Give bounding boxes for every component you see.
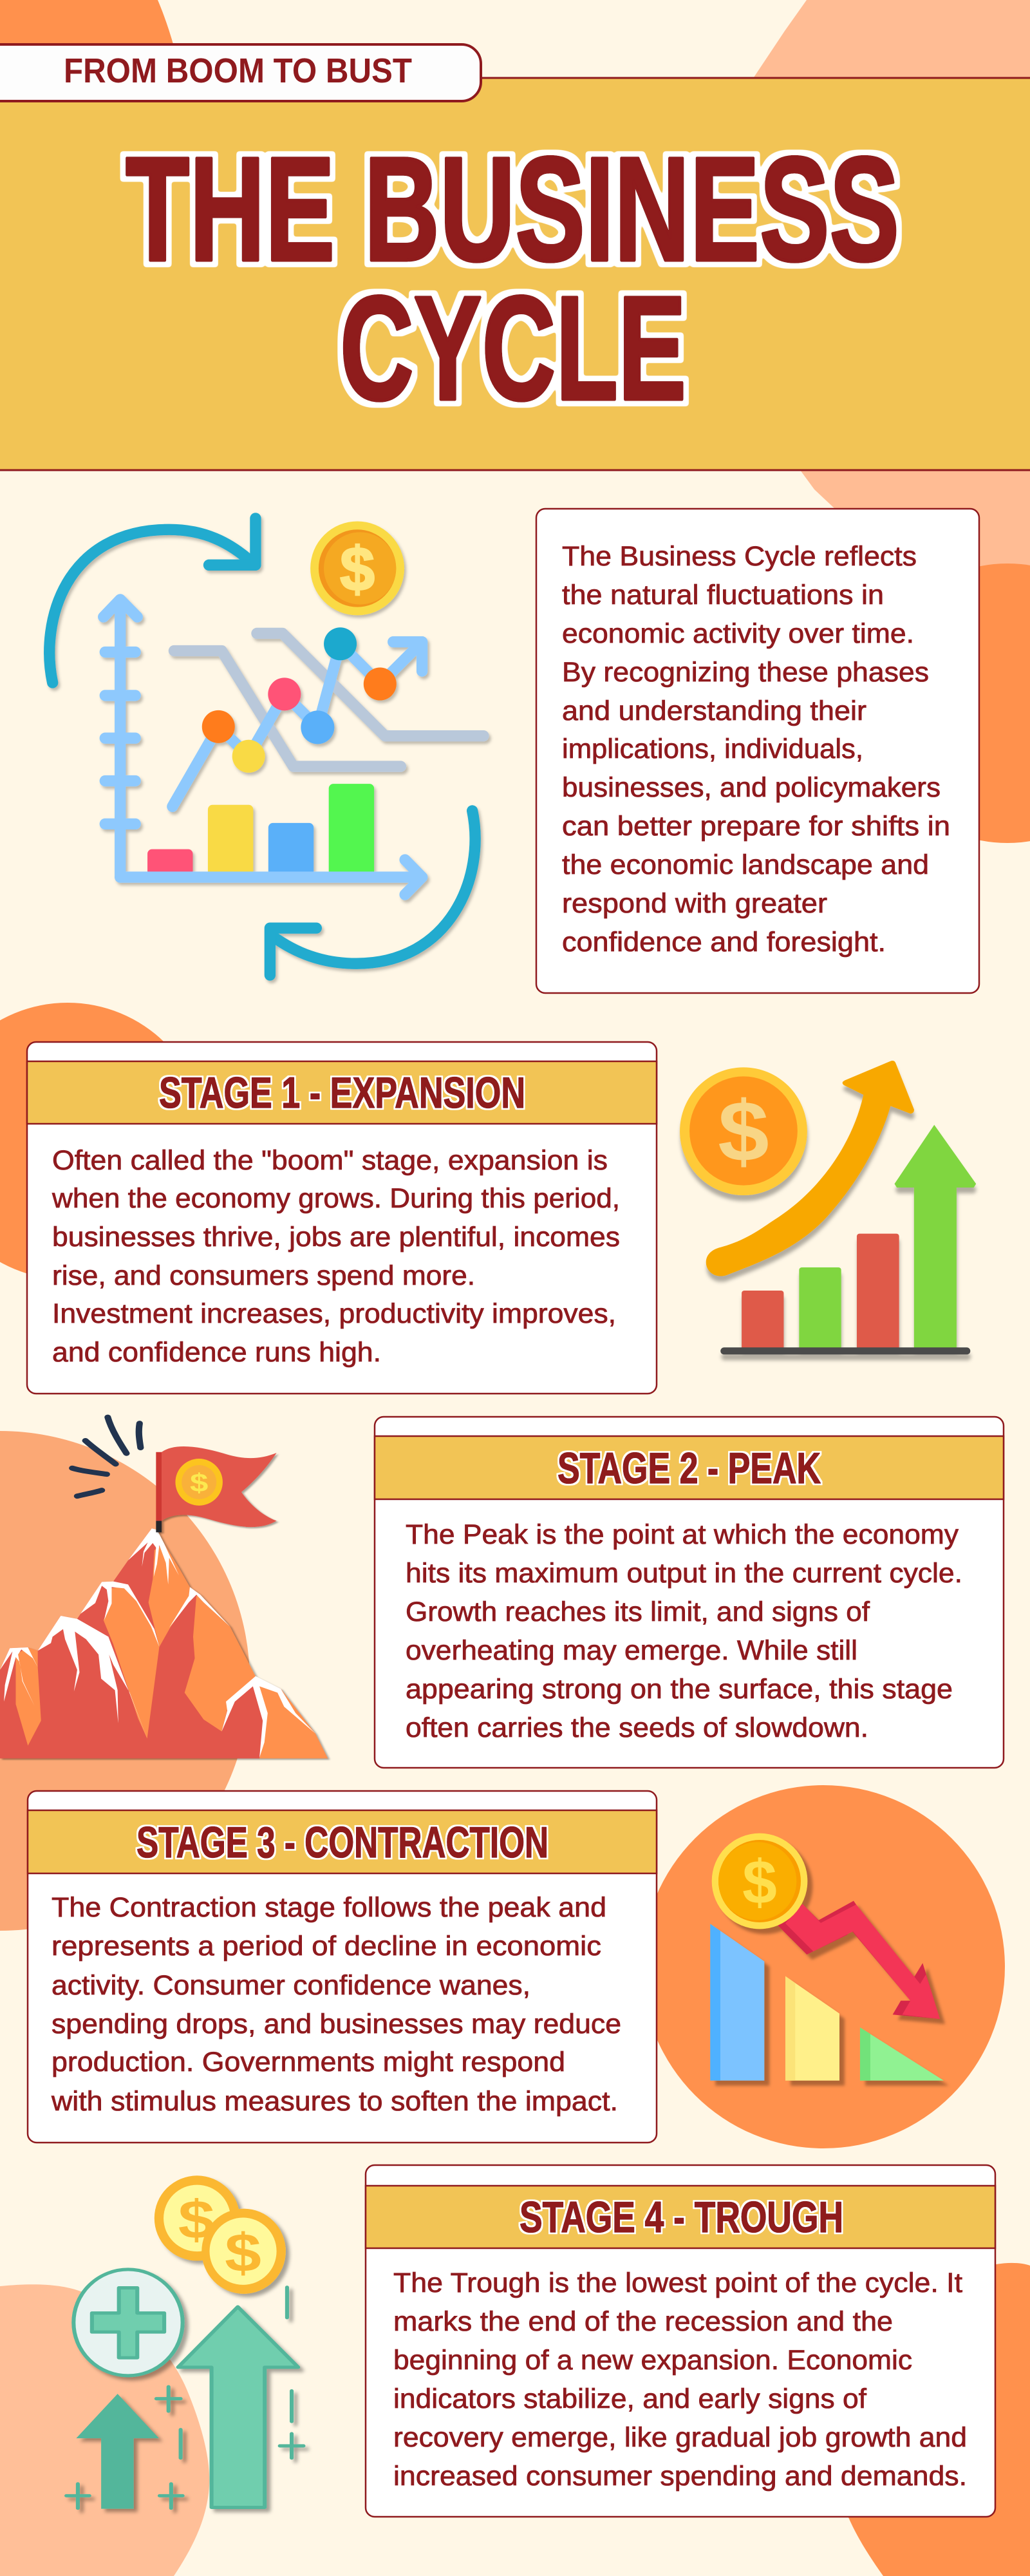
body text: stage 4: recovery emerge, like gradual job growth and <box>393 2422 967 2453</box>
body text: stage 4: beginning of a new expansion. Economic <box>393 2345 912 2376</box>
panel: intro: respond with greater <box>562 888 827 919</box>
background blob: top left orange <box>0 0 183 90</box>
body text: stage 4: The Trough is the lowest point of the cycle. It <box>393 2268 962 2298</box>
front coin: $ <box>225 2222 261 2283</box>
background blob: right orange circle <box>868 564 1030 843</box>
subtitle tag <box>0 44 481 101</box>
panel: intro: By recognizing these phases <box>562 657 929 688</box>
body text: stage 3: production. Governments might respond <box>52 2047 565 2078</box>
background blob: top right peach <box>747 0 1030 580</box>
back coin <box>154 2175 239 2260</box>
body text: stage 4: marks the end of the recession and the <box>393 2306 893 2337</box>
coin <box>310 521 404 615</box>
body text: stage 2: overheating may emerge. While still <box>406 1635 857 1666</box>
icon: declining chart with coin <box>710 1833 944 2081</box>
emphasis dashes <box>72 1417 140 1496</box>
gray trend lines <box>174 633 483 766</box>
small arrow <box>76 2394 159 2509</box>
cycle arrow top <box>50 518 256 683</box>
body text: stage 3: spending drops, and businesses may reduce <box>52 2009 621 2040</box>
bars <box>147 784 374 875</box>
rising arrow <box>706 1061 914 1276</box>
heading: stage 4: STAGE 4 - TROUGH <box>520 2193 843 2242</box>
body text: stage 3: The Contraction stage follows the peak and <box>52 1892 606 1923</box>
bars <box>710 1924 944 2081</box>
bars <box>742 1125 976 1350</box>
body text: stage 2: The Peak is the point at which the economy <box>406 1519 959 1550</box>
title text: CYCLE <box>340 265 686 431</box>
back coin: $ <box>178 2189 214 2250</box>
body text: stage 3 <box>51 1892 621 2117</box>
mountain <box>0 1528 328 1758</box>
coin: $ <box>340 534 375 604</box>
cycle arrow bottom <box>270 811 475 975</box>
panel: stage 3 <box>28 1791 657 2143</box>
title text <box>126 126 899 431</box>
body text: stage 1: businesses thrive, jobs are plentiful, incomes <box>52 1222 620 1253</box>
icon: business cycle chart <box>50 518 483 975</box>
icon: growth chart with coin <box>680 1061 976 1354</box>
panel: intro: economic activity over time. <box>562 618 914 649</box>
body text: stage 2 <box>406 1519 962 1743</box>
background blob: stage 3 orange circle <box>642 1785 1005 2148</box>
background blob: stage 2 peach circle <box>0 1431 250 1931</box>
heading: stage 1: STAGE 1 - EXPANSION <box>159 1068 525 1117</box>
panel: intro: implications, individuals, <box>562 734 863 764</box>
coin <box>680 1067 807 1195</box>
flag <box>156 1446 277 1532</box>
body text: stage 3: with stimulus measures to soften the impact. <box>51 2086 618 2117</box>
body text: stage 1: when the economy grows. During this period, <box>52 1183 620 1214</box>
coin: $ <box>742 1848 777 1917</box>
coin: $ <box>718 1084 769 1180</box>
flag coin <box>175 1459 223 1506</box>
body text: stage 2: appearing strong on the surface, this stage <box>406 1674 953 1705</box>
panel: intro: The Business Cycle reflects <box>562 541 917 572</box>
body text: stage 4: indicators stabilize, and early signs of <box>393 2383 867 2414</box>
background blob: stage 1 orange circle <box>0 1003 206 1280</box>
heading: stage 2: STAGE 2 - PEAK <box>557 1444 821 1493</box>
body text: stage 3: activity. Consumer confidence wanes, <box>52 1970 530 2001</box>
axes <box>104 600 422 895</box>
body text: stage 1: rise, and consumers spend more. <box>52 1260 475 1291</box>
body text: stage 1: Investment increases, productivity improves, <box>52 1298 616 1329</box>
title banner <box>0 78 1030 470</box>
panel: stage 2 <box>375 1417 1004 1768</box>
panel: stage 1 <box>27 1042 657 1394</box>
body text: stage 1: Often called the "boom" stage, expansion is <box>52 1145 608 1176</box>
body text: stage 4: increased consumer spending and demands. <box>393 2461 967 2492</box>
heading: stage 3: STAGE 3 - CONTRACTION <box>136 1818 548 1867</box>
panel: intro: can better prepare for shifts in <box>562 811 950 842</box>
body text: stage 2: often carries the seeds of slowdown. <box>406 1712 868 1743</box>
panel: intro: the economic landscape and <box>562 849 929 880</box>
body text: stage 1 <box>52 1145 620 1368</box>
line chart <box>173 627 422 806</box>
large arrow <box>178 2307 298 2507</box>
front coin <box>201 2209 286 2294</box>
body text: stage 4 <box>393 2268 967 2492</box>
panel: intro <box>536 509 979 993</box>
body text: stage 3: represents a period of decline in economic <box>52 1931 601 1962</box>
background blob: stage 4 peach <box>0 2284 209 2576</box>
base line <box>720 1347 970 1354</box>
icon: mountain peak with flag <box>0 1417 328 1758</box>
panel: stage 4 <box>366 2165 995 2517</box>
coin <box>712 1833 807 1929</box>
panel: intro: the natural fluctuations in <box>562 580 884 611</box>
body text: stage 1: and confidence runs high. <box>52 1337 381 1368</box>
falling arrow <box>778 1901 940 2019</box>
panel: intro: and understanding their <box>562 696 866 726</box>
panel: intro: confidence and foresight. <box>562 927 886 958</box>
background blob: bottom right orange <box>837 2263 1030 2576</box>
icon: recovery arrows and coins <box>66 2175 303 2509</box>
body text: stage 2: hits its maximum output in the current cycle. <box>406 1558 962 1589</box>
panel: intro: businesses, and policymakers <box>562 772 941 803</box>
plus badge <box>73 2269 183 2376</box>
sparkle marks <box>66 2287 303 2508</box>
body text: stage 2: Growth reaches its limit, and signs of <box>406 1596 870 1627</box>
flag coin: $ <box>190 1469 208 1497</box>
subtitle tag: FROM BOOM TO BUST <box>64 52 412 90</box>
